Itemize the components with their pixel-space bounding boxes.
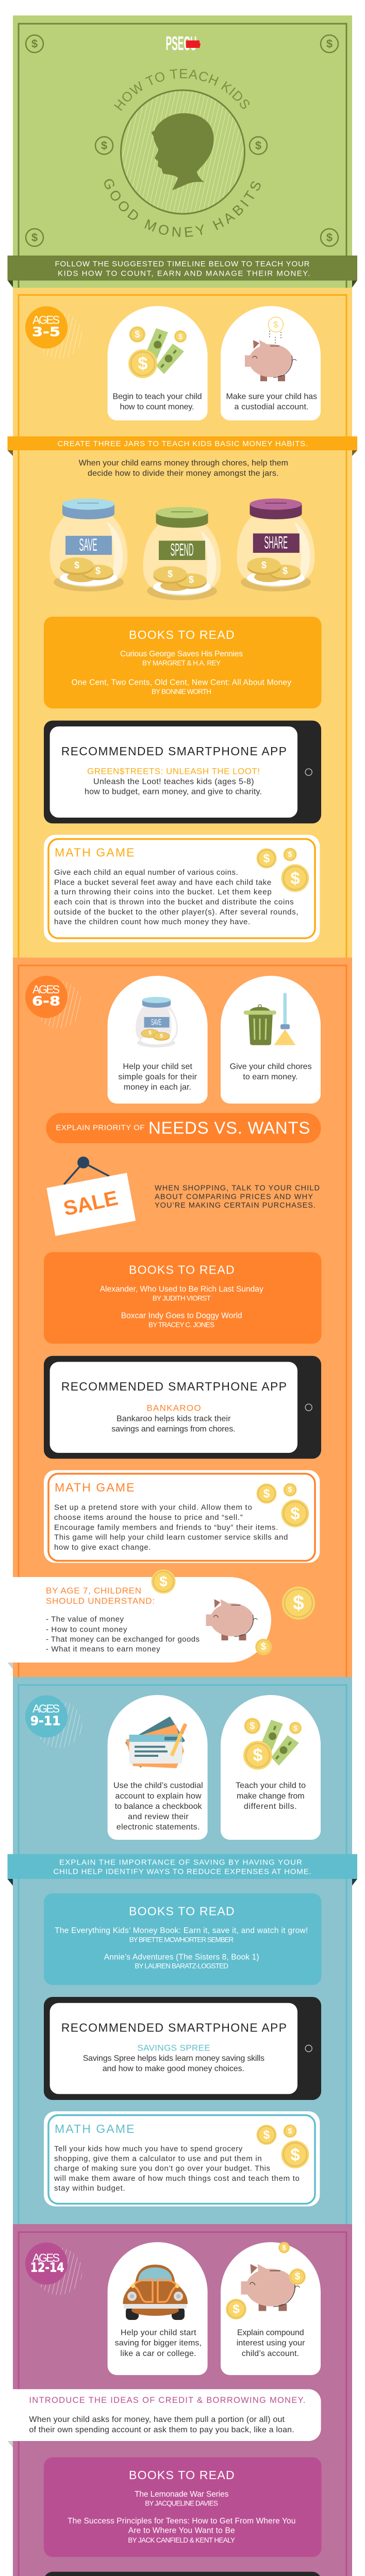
title: good money habits: GOOD MONEY HABITS <box>104 179 261 237</box>
icon: dollar right of portrait <box>250 137 267 155</box>
card text: Begin to teach your child <box>112 393 202 401</box>
card text: account to explain how <box>115 1792 202 1801</box>
card: chores <box>221 976 321 1104</box>
icon: coins and bills: $ <box>253 1745 263 1765</box>
icon: child silhouette medallion <box>121 90 244 214</box>
smartphone app: savings and earnings from chores. <box>111 1425 235 1433</box>
card: simple goals <box>108 976 208 1104</box>
jar: save: $ <box>95 566 101 576</box>
math game: a turn throwing their coins into the bucket. Let them keep <box>54 888 272 896</box>
panel: ages 3-5 <box>7 287 357 958</box>
icon: coins and bills <box>128 326 187 378</box>
icon: coins: $ <box>290 2145 300 2164</box>
books to read: BY MARGRET & H.A. REY <box>142 659 221 667</box>
icon: dollar corner top left <box>26 35 43 53</box>
pill: needs vs wants <box>46 1113 321 1143</box>
card text: to earn money. <box>243 1073 297 1081</box>
callout: credit and borrowing: When your child asks for money, have them pull a portion (or all) out <box>29 2415 285 2424</box>
math game: This game will help your child learn customer service skills and <box>54 1533 288 1541</box>
icon: coins and bills: $ <box>135 329 140 340</box>
text: shopping tip: YOU’RE MAKING CERTAIN PURCHASES. <box>155 1201 316 1210</box>
icon: coins: $ <box>263 852 270 865</box>
panel: ages 9-11 <box>7 1677 357 2224</box>
age badge 3-5: AGES <box>32 313 60 327</box>
books to read: The Everything Kids’ Money Book: Earn it, save it, and watch it grow! <box>55 1926 308 1935</box>
jar: spend <box>143 507 221 600</box>
jar: save: $ <box>74 560 79 570</box>
icon: trash can and broom <box>244 993 295 1045</box>
banner: three jars: CREATE THREE JARS TO TEACH KIDS BASIC MONEY HABITS. <box>58 439 308 448</box>
banner: intro: FOLLOW THE SUGGESTED TIMELINE BELOW TO TEACH YOUR <box>55 260 310 268</box>
icon: piggy bank with coin <box>245 317 296 381</box>
title: how to teach kids: HOW TO TEACH KIDS <box>114 69 250 111</box>
age badge 3-5 <box>25 306 82 359</box>
icon: coins <box>257 1483 309 1527</box>
card text <box>113 1782 203 1832</box>
smartphone app <box>44 1997 321 2100</box>
jar: save: SAVE <box>79 535 97 555</box>
icon: coins and bills: $ <box>250 1721 255 1731</box>
card text: Teach your child to <box>236 1782 306 1790</box>
panel: header title <box>7 15 357 287</box>
card text: Explain compound <box>237 2329 304 2337</box>
icon: save jar: $ <box>160 1033 163 1039</box>
math game <box>44 835 320 942</box>
card text: how to count money. <box>120 403 194 411</box>
books to read: BY BONNIE WORTH <box>152 688 211 696</box>
icon: coins: $ <box>288 850 292 859</box>
math game: Give each child an equal number of various coins. <box>54 868 238 877</box>
smartphone app: RECOMMENDED SMARTPHONE APP <box>61 744 287 758</box>
age badge 6-8: 6-8 <box>32 993 60 1009</box>
age badge 12-14: 12-14 <box>30 2260 64 2275</box>
icon: coins: $ <box>290 1504 300 1523</box>
card: compound interest <box>221 2242 321 2375</box>
banner: three jars <box>7 436 357 456</box>
age badge 9-11: AGES <box>32 1702 60 1715</box>
books to read: BOOKS TO READ <box>129 1905 235 1918</box>
smartphone app: SAVINGS SPREE <box>137 2043 210 2053</box>
books to read <box>44 617 322 708</box>
icon: coins and bills: $ <box>138 354 148 374</box>
smartphone app: RECOMMENDED SMARTPHONE APP <box>61 2021 287 2034</box>
callout: credit and borrowing <box>7 2389 321 2448</box>
books to read: BOOKS TO READ <box>129 628 235 641</box>
card text: simple goals for their <box>118 1073 197 1081</box>
callout: by age 7: - How to count money <box>46 1625 127 1634</box>
jar: spend: $ <box>189 574 194 585</box>
icon: piggy bank and coins: $ <box>233 2302 240 2316</box>
icon: coins <box>257 2124 309 2168</box>
card: checkbook <box>108 1695 208 1840</box>
jar: spend: SPEND <box>170 540 194 560</box>
icon: dollar corner top left: $ <box>31 37 38 50</box>
jar: spend: $ <box>168 569 173 579</box>
books to read: Curious George Saves His Pennies <box>120 650 243 658</box>
icon: dollar corner top right: $ <box>326 37 333 50</box>
icon: dollar left of portrait: $ <box>101 139 107 152</box>
math game: choose items around the house to price and “sell.” <box>54 1513 243 1522</box>
math game <box>44 1470 320 1563</box>
math game: outside of the bucket to the other player(s). After several rounds, <box>54 908 298 917</box>
card text <box>115 2329 202 2358</box>
callout: credit and borrowing: of their own spending account or ask them to pay you back, like a loan. <box>29 2426 294 2434</box>
icon: coins: $ <box>290 869 300 888</box>
callout: by age 7: - What it means to earn money <box>46 1645 160 1654</box>
icon: checks and pen <box>125 1717 186 1768</box>
icon: coins and bills: $ <box>178 332 182 341</box>
card text: Make sure your child has <box>226 393 317 401</box>
icon: dollar corner bottom left <box>26 229 43 246</box>
icon: save jar: $ <box>148 1030 152 1036</box>
card text: different bills. <box>244 1802 297 1811</box>
math game <box>44 2111 320 2207</box>
icon: piggy bank and coins <box>226 2242 306 2319</box>
math game: stay within budget. <box>54 2184 125 2193</box>
card text: a custodial account. <box>234 403 308 411</box>
icon: save jar: SAVE <box>151 1017 161 1027</box>
books to read: BY LAUREN BARATZ-LOGSTED <box>135 1962 228 1970</box>
math game: how to give exact change. <box>54 1543 151 1552</box>
callout: by age 7 <box>7 1569 315 1669</box>
books to read: BY JACK CANFIELD & KENT HEALY <box>128 2536 235 2544</box>
icon: coins: $ <box>263 1487 270 1500</box>
card: custodial account <box>221 306 321 420</box>
card text: money in each jar. <box>124 1083 191 1092</box>
text: jars intro: When your child earns money through chores, help them <box>79 459 288 468</box>
smartphone app <box>44 2572 321 2576</box>
books to read: BOOKS TO READ <box>129 1263 235 1277</box>
text: shopping tip: ABOUT COMPARING PRICES AND WHY <box>155 1193 313 1201</box>
smartphone app: GREEN$TREETS: UNLEASH THE LOOT! <box>87 767 260 776</box>
books to read: Annie’s Adventures (The Sisters 8, Book 1) <box>104 1953 259 1962</box>
icon: car <box>123 2265 188 2320</box>
age badge 12-14: AGES <box>32 2251 60 2264</box>
math game: Set up a pretend store with your child. Allow them to <box>54 1503 252 1512</box>
icon: coins: $ <box>288 1485 292 1494</box>
icon: dollar corner bottom right <box>321 229 338 246</box>
icon: dollar right of portrait: $ <box>255 139 261 152</box>
card text: and review their <box>128 1812 189 1821</box>
icon: save jar <box>136 997 178 1047</box>
icon: piggy bank and coins: $ <box>295 2271 301 2282</box>
books to read: BY TRACEY C. JONES <box>148 1321 214 1329</box>
books to read: The Success Principles for Teens: How to Get From Where You <box>68 2517 295 2526</box>
card text: make change from <box>237 1792 305 1801</box>
pill: needs vs wants: NEEDS VS. WANTS <box>148 1118 310 1138</box>
banner: importance of saving: CHILD HELP IDENTIFY WAYS TO REDUCE EXPENSES AT HOME. <box>53 1867 311 1876</box>
banner: intro <box>7 256 357 287</box>
smartphone app: RECOMMENDED SMARTPHONE APP <box>61 1380 287 1393</box>
math game: will make them aware of how much things cost and teach them to <box>54 2174 300 2183</box>
callout: by age 7: - The value of money <box>46 1615 124 1624</box>
card text: electronic statements. <box>117 1823 200 1832</box>
pill: needs vs wants: EXPLAIN PRIORITY OF <box>56 1123 144 1132</box>
icon: dollar corner bottom left: $ <box>31 231 38 244</box>
smartphone app <box>44 721 321 823</box>
card text <box>112 393 202 411</box>
math game: MATH GAME <box>55 846 134 859</box>
books to read <box>44 1893 322 1985</box>
math game: shopping, give them a calculator to use and put them in <box>54 2154 262 2163</box>
books to read: BOOKS TO READ <box>129 2468 235 2482</box>
banner: importance of saving <box>7 1854 357 1886</box>
icon: coins around callout: $ <box>159 1573 168 1589</box>
logo: PSECU <box>166 33 201 55</box>
books to read <box>44 2458 322 2557</box>
card: make change <box>221 1695 321 1840</box>
icon: sale sign <box>46 1157 136 1236</box>
icon: piggy bank with coin: $ <box>273 319 278 330</box>
card: bigger items <box>108 2242 208 2375</box>
age badge 12-14 <box>25 2243 82 2295</box>
icon: coins: $ <box>288 2127 292 2136</box>
panel: ages 12-14 <box>7 2224 352 2576</box>
icon: piggy bank <box>206 1599 258 1640</box>
callout: by age 7: BY AGE 7, CHILDREN <box>46 1586 141 1596</box>
card text <box>236 1782 306 1811</box>
math game: each coin that is thrown into the bucket and distribute the coins <box>54 897 294 907</box>
math game: have the children count how much money they have. <box>54 918 250 926</box>
age badge 9-11: 9-11 <box>30 1714 60 1728</box>
jar: save <box>50 499 127 591</box>
smartphone app: and how to make good money choices. <box>103 2064 244 2073</box>
icon: coins around callout <box>152 1569 315 1655</box>
card text <box>230 1062 312 1081</box>
icon: coins and bills <box>243 1718 302 1770</box>
card text: interest using your <box>237 2339 305 2347</box>
callout: by age 7: - That money can be exchanged for goods <box>46 1635 200 1643</box>
banner: intro: KIDS HOW TO COUNT, EARN AND MANAGE THEIR MONEY. <box>58 269 310 278</box>
card text <box>237 2329 305 2358</box>
books to read: Alexander, Who Used to Be Rich Last Sunday <box>100 1285 263 1294</box>
card text: Help your child set <box>123 1062 193 1071</box>
age badge 3-5: 3-5 <box>32 325 60 339</box>
smartphone app <box>44 1356 321 1459</box>
icon: dollar corner bottom right: $ <box>326 231 333 244</box>
math game: Tell your kids how much you have to spend grocery <box>54 2144 243 2154</box>
card text: Use the child’s custodial <box>113 1782 203 1790</box>
math game: charge of making sure you don’t go over your budget. This <box>54 2164 270 2173</box>
age badge 9-11 <box>25 1696 82 1748</box>
smartphone app: Savings Spree helps kids learn money saving skills <box>83 2054 264 2063</box>
smartphone app: how to budget, earn money, and give to charity. <box>85 787 262 796</box>
books to read: Boxcar Indy Goes to Doggy World <box>121 1312 242 1320</box>
icon: sale sign: SALE <box>61 1187 120 1221</box>
card text: child’s account. <box>242 2349 299 2358</box>
text: shopping tip <box>155 1184 320 1210</box>
jar: share: $ <box>261 560 267 570</box>
age badge 6-8 <box>25 976 82 1028</box>
icon: dollar left of portrait <box>95 137 113 155</box>
card: count money <box>108 306 208 420</box>
books to read: BY JACQUELINE DAVIES <box>145 2500 218 2507</box>
callout: by age 7: SHOULD UNDERSTAND: <box>46 1596 155 1606</box>
math game: MATH GAME <box>55 2122 134 2136</box>
jar: share: $ <box>283 566 288 576</box>
icon: coins <box>257 848 309 892</box>
books to read: BY BRETTE MCWHORTER SEMBER <box>129 1936 234 1943</box>
books to read: One Cent, Two Cents, Old Cent, New Cent: All About Money <box>72 678 291 687</box>
card text: saving for bigger items, <box>115 2339 202 2347</box>
callout: credit and borrowing: INTRODUCE THE IDEAS OF CREDIT & BORROWING MONEY. <box>29 2396 305 2405</box>
smartphone app: Bankaroo helps kids track their <box>117 1414 231 1423</box>
card text <box>118 1062 197 1092</box>
card text <box>226 393 317 411</box>
smartphone app: Unleash the Loot! teaches kids (ages 5-8) <box>93 777 254 786</box>
jar: share <box>237 499 314 591</box>
smartphone app: BANKAROO <box>146 1403 201 1413</box>
books to read: Are to Where You Want to Be <box>128 2527 235 2535</box>
icon: piggy bank and coins: $ <box>282 2244 286 2251</box>
icon: coins: $ <box>263 2128 270 2142</box>
text: jars intro: decide how to divide their money amongst the jars. <box>88 469 278 478</box>
books to read: BY JUDITH VIORST <box>153 1294 211 1302</box>
logo: PSECU: PSECU <box>166 33 197 55</box>
math game: Encourage family members and friends to “buy” their items. <box>54 1523 278 1532</box>
books to read <box>44 1252 322 1344</box>
icon: coins around callout: $ <box>261 1641 267 1652</box>
jar: share: SHARE <box>264 533 288 552</box>
icon: coins around callout: $ <box>293 1592 304 1614</box>
card text: like a car or college. <box>120 2349 196 2358</box>
banner: importance of saving: EXPLAIN THE IMPORTANCE OF SAVING BY HAVING YOUR <box>59 1858 302 1867</box>
icon: dollar corner top right <box>321 35 338 53</box>
icon: coins and bills: $ <box>293 1724 297 1732</box>
card text: Give your child chores <box>230 1062 312 1071</box>
panel: ages 6-8 <box>7 958 352 1677</box>
age badge 6-8: AGES <box>32 983 60 996</box>
card text: Help your child start <box>121 2329 196 2337</box>
books to read: The Lemonade War Series <box>135 2490 229 2499</box>
math game: Place a bucket several feet away and have each child take <box>54 878 271 887</box>
math game: MATH GAME <box>55 1481 134 1494</box>
text: jars intro <box>79 459 288 478</box>
text: shopping tip: WHEN SHOPPING, TALK TO YOUR CHILD <box>155 1184 320 1193</box>
card text: to balance a checkbook <box>115 1802 202 1811</box>
